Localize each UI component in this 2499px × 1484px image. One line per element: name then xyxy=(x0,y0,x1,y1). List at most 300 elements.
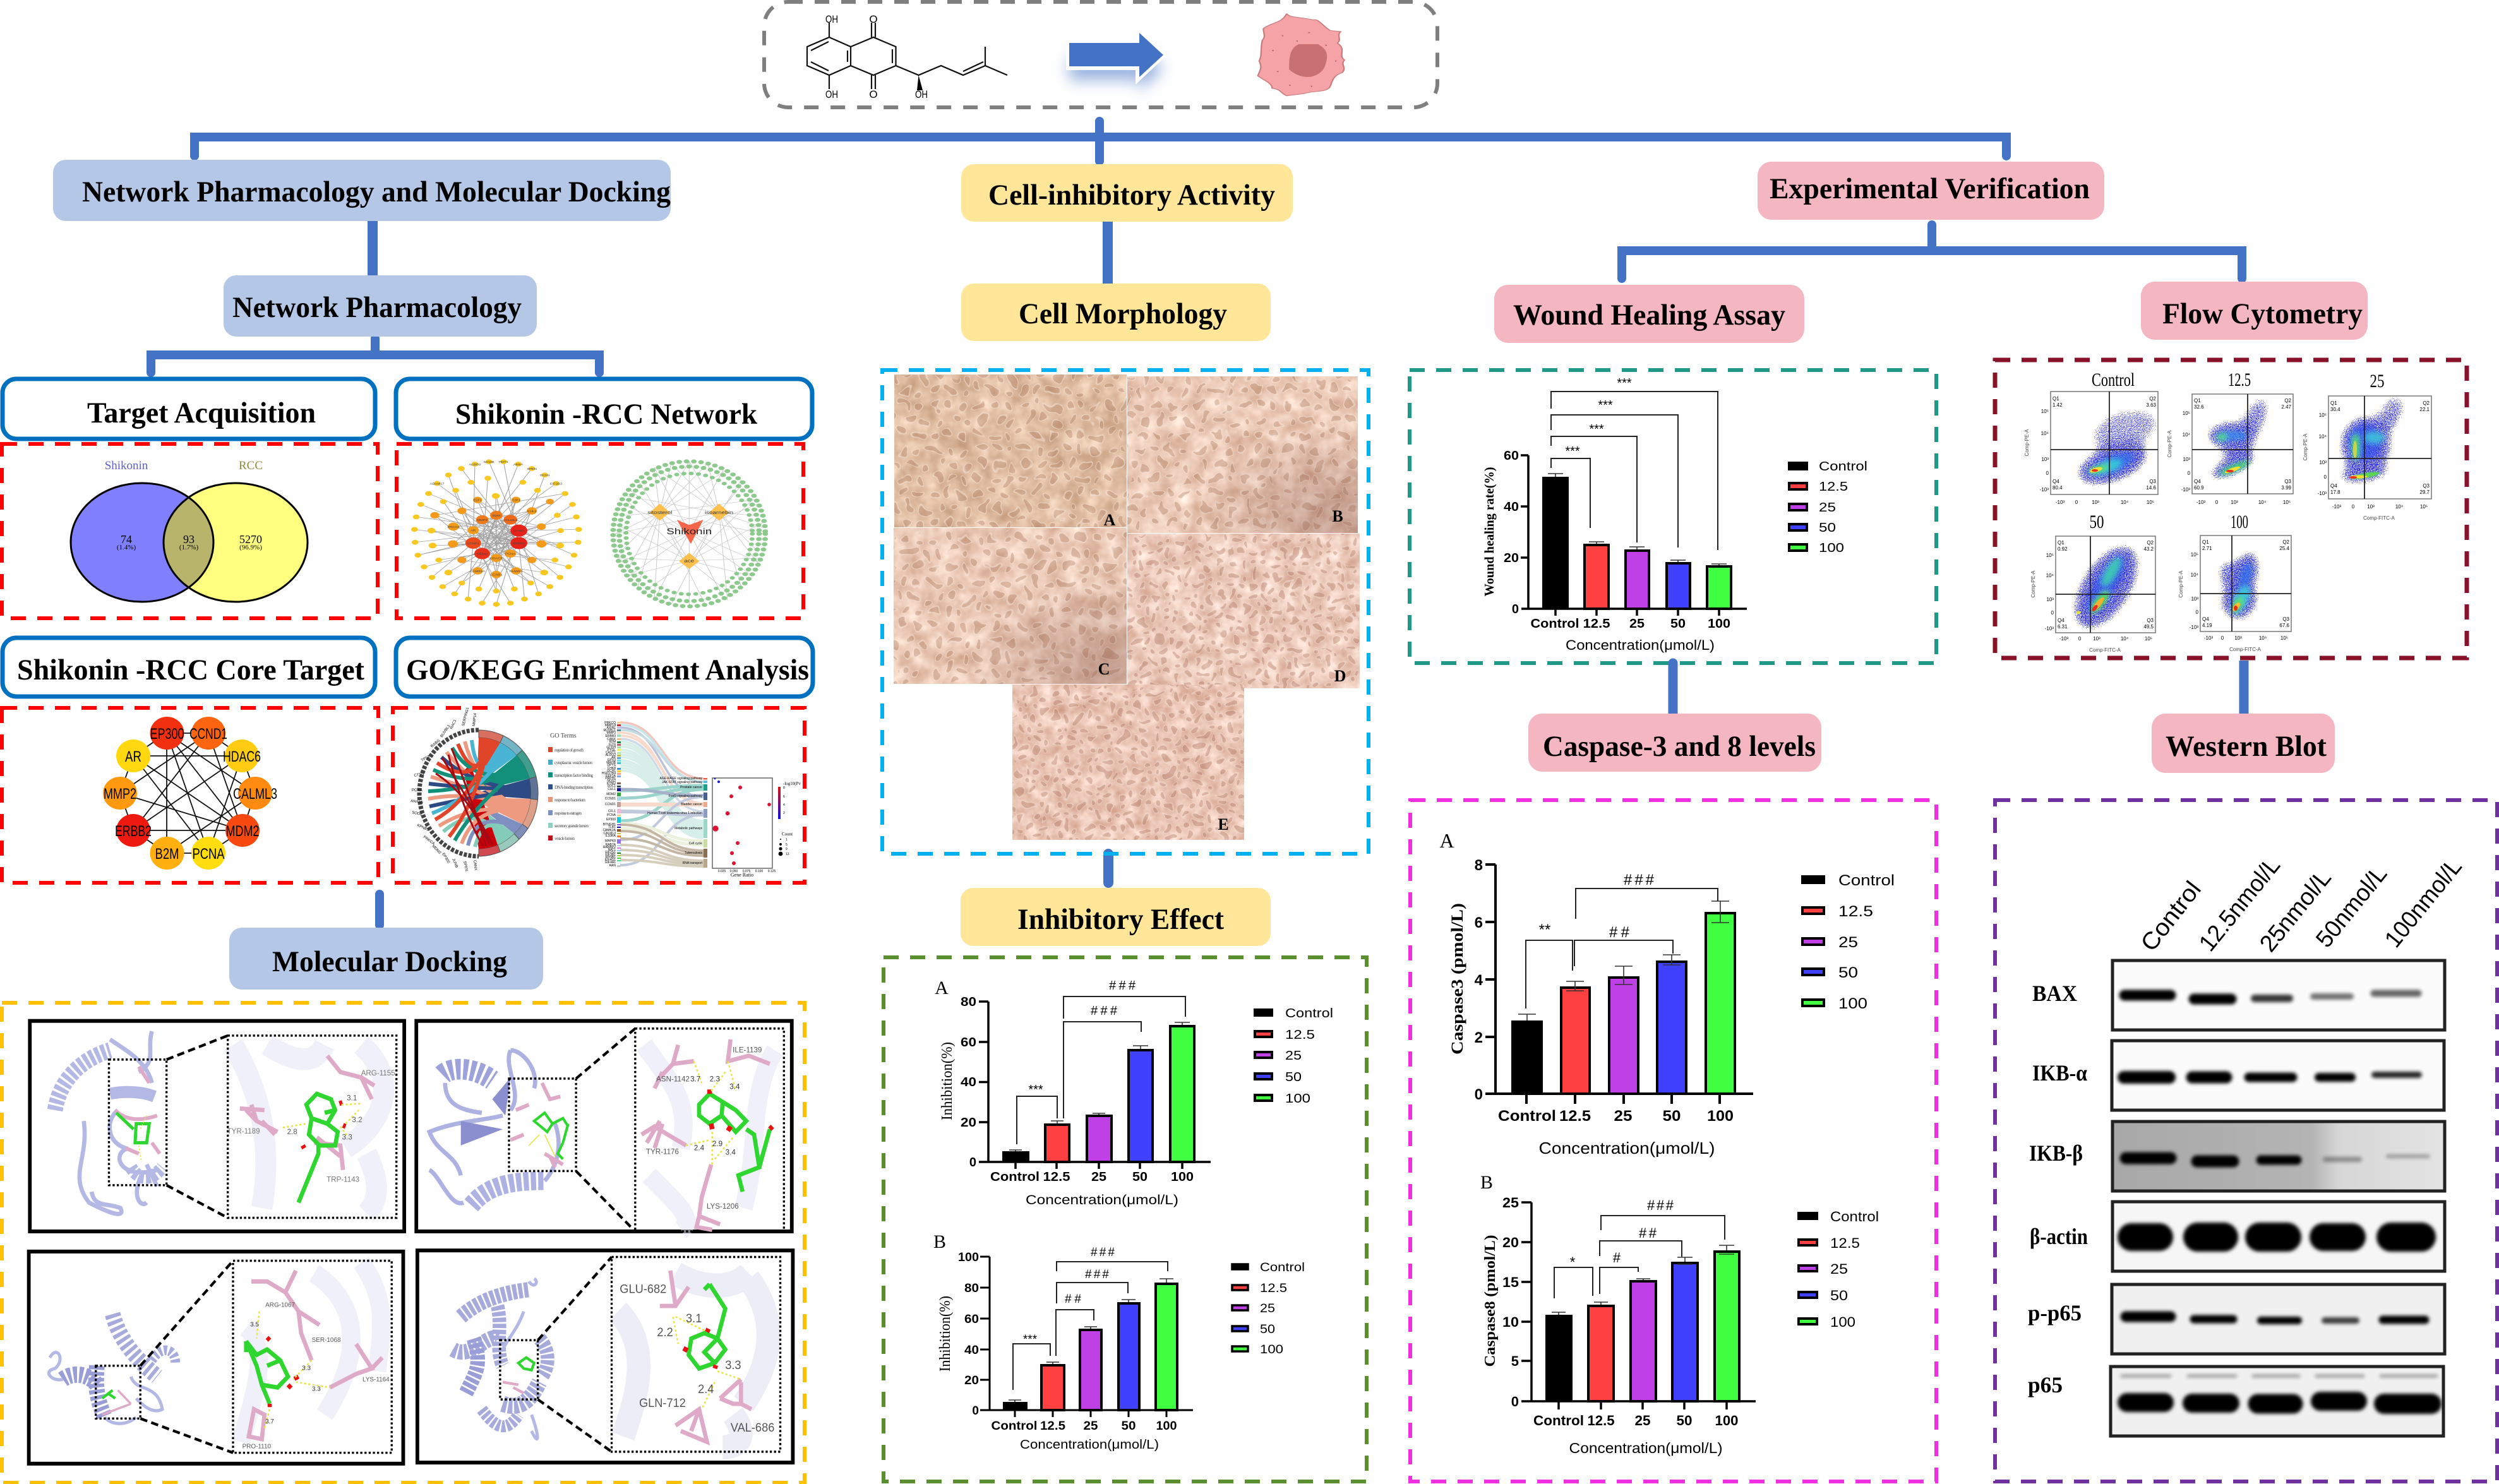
left labels: EIF3B1 xyxy=(605,853,616,857)
bar chart A: caspase 3: 4 xyxy=(1475,972,1483,989)
legend: Control xyxy=(1819,460,1867,474)
heading: Network Pharmacology xyxy=(224,275,537,337)
flow plot: 12.5: 10⁴ xyxy=(2258,500,2267,505)
micrograph C xyxy=(894,528,1127,684)
left labels: CAST1 xyxy=(606,751,616,755)
bar chart A: inhibition: Control xyxy=(990,1170,1040,1184)
flow plot: Control: 10⁵ xyxy=(2147,500,2154,505)
panel: Shikonin-RCC networks xyxy=(397,444,803,618)
nodes xyxy=(103,717,277,870)
bar chart B: caspase 8: 100 xyxy=(1715,1413,1738,1428)
heading: Cell Morphology xyxy=(961,284,1271,341)
heading: Western Blot xyxy=(2152,714,2335,773)
left labels: FLT8 xyxy=(609,743,616,747)
panel: molecular docking xyxy=(2,1003,805,1483)
bar chart A: caspase 3: 2 xyxy=(1475,1029,1483,1046)
bar chart A: caspase 3: 8 xyxy=(1475,857,1483,874)
docking view 2: TYR-1176 xyxy=(646,1147,679,1156)
left labels: GCH1 xyxy=(607,769,616,773)
left labels: HSD17B4 xyxy=(602,772,616,775)
left labels: MMP3 xyxy=(607,731,616,735)
docking view 2: ASN-1142 xyxy=(656,1074,690,1083)
flow plot: 25: Q4 xyxy=(2330,483,2337,489)
chart: PPI network: ABBA xyxy=(513,464,524,467)
column labels xyxy=(2136,853,2467,957)
bar chart B: inhibition: 100 xyxy=(1156,1420,1177,1433)
left labels: CANX xyxy=(607,738,616,741)
column labels: 12.5nmol/L xyxy=(2194,853,2286,957)
tick labels: TP53 xyxy=(421,755,431,763)
right nodes: JAK-STAT signaling pathway xyxy=(662,781,702,784)
bar chart B: inhibition: 80 xyxy=(964,1282,979,1295)
flow plot: Control: 10³ xyxy=(2092,500,2099,505)
legend: GO terms: secretory granule lumen xyxy=(554,823,589,829)
legend xyxy=(1789,460,1867,555)
heading: Shikonin -RCC Network xyxy=(396,379,812,439)
tick labels: PRKCA xyxy=(422,835,435,846)
flow plot: 50: -10³ xyxy=(2059,636,2068,642)
bar chart B: inhibition: 12.5 xyxy=(1040,1420,1065,1433)
chart: PPI network: XRCC6 xyxy=(447,525,460,529)
legend xyxy=(1802,872,1895,1012)
left labels: DPYS xyxy=(607,763,616,767)
micrograph E xyxy=(1012,685,1244,840)
legend: 12.5 xyxy=(1830,1235,1860,1251)
left labels: RAB7A xyxy=(606,843,616,847)
flow plot: 50: Q1 xyxy=(2058,540,2065,546)
bar chart: wound healing rate: *** xyxy=(1565,445,1580,458)
chart: PPI network: PCNA xyxy=(505,553,516,556)
bar chart B: caspase 8: 25 xyxy=(1634,1413,1651,1428)
blot: β-actin: β-actin xyxy=(2030,1224,2088,1249)
bar chart B: inhibition: *** xyxy=(1023,1333,1038,1346)
flow plot: 12.5: 10⁴ xyxy=(2183,432,2191,438)
flow plot: Control: -10³ xyxy=(2056,500,2065,505)
bar chart A: inhibition: 50 xyxy=(1132,1170,1148,1184)
flow plot: 25: Comp-PE-A xyxy=(2303,433,2308,460)
panel: inhibitory effect charts xyxy=(884,957,1367,1481)
panel: venn diagram: 93 xyxy=(183,533,195,546)
left labels: NAT1 xyxy=(608,848,616,852)
bar chart: wound healing rate: 40 xyxy=(1504,500,1519,514)
bar chart B: caspase 8: 20 xyxy=(1502,1235,1519,1250)
bar chart B: inhibition: Concentration(μmol/L) xyxy=(1020,1438,1159,1452)
flow plot: 100 xyxy=(2178,512,2291,652)
flow plot: Control: 0 xyxy=(2075,500,2078,505)
docking view 3: LYS-1164 xyxy=(363,1377,390,1384)
flow plot: 25: 10³ xyxy=(2319,460,2327,465)
legend: 12.5 xyxy=(1819,480,1848,494)
left labels: PYGL xyxy=(608,748,616,752)
chart: PPI network: ADAM17 xyxy=(429,482,445,486)
flow plot: Control xyxy=(2024,369,2166,505)
chart: PPI network: ERBB2 xyxy=(513,542,525,546)
bar chart A: caspase 3: ** xyxy=(1539,921,1550,938)
docking view 2: 3.4 xyxy=(729,1082,740,1091)
flow plot: 100: Q3 xyxy=(2282,616,2290,622)
flow plot: 12.5: 10⁵ xyxy=(2183,410,2190,416)
panel: venn diagram: (1.4%) xyxy=(117,544,136,551)
heading: Target Acquisition xyxy=(3,379,375,439)
left labels: GCDH xyxy=(606,746,616,750)
chart: PPI network: CALML3 xyxy=(503,519,518,522)
flow plot: 25: 10³ xyxy=(2367,504,2375,510)
chart: PPI network: EP300 xyxy=(513,530,524,533)
column labels: 25nmol/L xyxy=(2255,865,2337,957)
bar chart B: inhibition: ### xyxy=(1091,1246,1115,1259)
chart: compound-target network: isoarnebin xyxy=(705,510,733,515)
flow plot: 25: 22.1 xyxy=(2419,407,2430,412)
left labels: NOS2 xyxy=(607,779,616,783)
legend: 12.5 xyxy=(1260,1282,1287,1295)
tick labels: JUNB xyxy=(451,858,458,868)
docking view 2: 3.7 xyxy=(690,1074,700,1083)
flow plot: 12.5: 32.6 xyxy=(2194,404,2204,410)
tick labels: SOD2 xyxy=(412,811,422,817)
chart: KEGG dot plot: 9 xyxy=(786,847,788,851)
right nodes: Metabolic pathways xyxy=(674,827,702,830)
flow plot: 100: -10³ xyxy=(2204,635,2213,641)
docking view 2: ILE-1139 xyxy=(733,1045,762,1055)
flow plot: Control: 14.6 xyxy=(2146,485,2157,491)
bar chart A: caspase 3: ## xyxy=(1609,924,1630,941)
legend: 25 xyxy=(1285,1049,1302,1063)
flow plot: 50: 6.31 xyxy=(2058,624,2068,630)
blot: p-p65 xyxy=(2028,1284,2445,1354)
flow plot: 25: 0 xyxy=(2324,474,2327,480)
heading: GO/KEGG Enrichment Analysis xyxy=(396,638,813,697)
dashed frame xyxy=(764,2,1437,107)
blot: BAX: BAX xyxy=(2032,981,2077,1006)
flow plot: 25: -10³ xyxy=(2332,504,2341,510)
flow plot: 50: 10³ xyxy=(2046,597,2054,602)
legend: 50 xyxy=(1285,1070,1302,1084)
flow plot: 25: Q1 xyxy=(2330,400,2337,406)
shikonin structure xyxy=(807,13,1007,100)
docking view 3: SER-1068 xyxy=(312,1337,341,1344)
micrograph E: E xyxy=(1218,815,1229,834)
docking view 1: 2.8 xyxy=(287,1127,297,1136)
heading: Flow Cytometry: Flow Cytometry xyxy=(2162,297,2363,330)
left labels: KPNB1 xyxy=(606,856,616,859)
bar chart A: inhibition: 100 xyxy=(1171,1170,1194,1184)
left labels: MDM2 xyxy=(606,793,616,796)
nodes: CCND1 xyxy=(189,726,227,743)
bar chart B: caspase 8: * xyxy=(1570,1254,1576,1270)
bar chart B: inhibition: Control xyxy=(992,1420,1037,1433)
chart: KEGG dot plot: 4 xyxy=(783,803,785,807)
heading: Cell Morphology: Cell Morphology xyxy=(1019,297,1227,330)
shikonin structure: OH xyxy=(915,88,928,100)
flow plot: 25: 25 xyxy=(2370,371,2385,392)
bar chart: wound healing rate xyxy=(1482,376,1867,653)
chart: compound-target network: ace xyxy=(684,558,694,563)
tick labels: SERPING1 xyxy=(462,707,470,726)
bar chart: wound healing rate: Control xyxy=(1531,617,1579,631)
chart: KEGG dot plot: 0.100 xyxy=(755,870,763,873)
flow plot: 50: 0 xyxy=(2051,610,2054,616)
flow plot: 50: 50 xyxy=(2089,512,2104,532)
flow plot: Control: 10⁴ xyxy=(2121,500,2129,505)
bar chart: wound healing rate: Wound healing rate(%) xyxy=(1482,467,1497,596)
heading: Western Blot: Western Blot xyxy=(2166,730,2327,763)
legend: 25 xyxy=(1838,934,1858,951)
chart: KEGG dot plot: 0.050 xyxy=(730,870,738,873)
legend: GO terms: vesicle lumen xyxy=(554,836,575,841)
flow plot: 50 xyxy=(2030,512,2155,653)
flow plot: 100: 25.4 xyxy=(2279,546,2290,551)
flow plot: 50: 10³ xyxy=(2093,636,2100,642)
flow plot: 25: 10⁴ xyxy=(2319,434,2327,440)
tick labels: RAC1 xyxy=(450,719,458,730)
chart: PPI network: ALDO2 xyxy=(469,464,481,467)
bar chart: wound healing rate: *** xyxy=(1589,422,1604,436)
left labels: EP300 xyxy=(606,818,616,822)
chart: KEGG dot plot: Count xyxy=(782,832,793,837)
chart: PPI network: E2F1 xyxy=(473,499,482,502)
docking view 3 xyxy=(29,1252,403,1464)
flow plot: 25: -10³ xyxy=(2318,491,2327,496)
chart: Sankey diagram xyxy=(602,721,707,868)
flow plot: 100: Comp-PE-A xyxy=(2178,570,2184,597)
legend: GO terms: regulation of growth xyxy=(554,748,584,753)
docking view 2: 2.3 xyxy=(710,1074,720,1083)
heading: Shikonin -RCC Core Target xyxy=(3,638,375,697)
legend: 100 xyxy=(1838,995,1867,1012)
flow plot: 50: 43.2 xyxy=(2143,546,2154,552)
panel: western blot xyxy=(1995,800,2497,1481)
micrograph D: D xyxy=(1334,667,1346,685)
bar chart B: inhibition: B xyxy=(933,1231,946,1252)
bar chart A: inhibition xyxy=(935,978,1333,1207)
bar chart A: caspase 3: 0 xyxy=(1475,1086,1483,1103)
bar chart A: inhibition: 60 xyxy=(961,1036,976,1050)
bar chart B: inhibition: 60 xyxy=(964,1313,979,1326)
bar chart A: inhibition: 25 xyxy=(1091,1170,1106,1184)
panel: venn diagram: 74 xyxy=(121,533,132,546)
bar chart A: caspase 3: 100 xyxy=(1707,1108,1734,1125)
heading: Caspase-3 and 8 levels xyxy=(1528,714,1821,772)
chart: PPI network: MADB xyxy=(484,461,494,464)
left labels: KYNU xyxy=(607,782,616,786)
legend: Control xyxy=(1830,1209,1879,1224)
chart: KEGG dot plot: 6 xyxy=(783,795,785,799)
flow plot: Control: 10³ xyxy=(2041,457,2049,462)
tick labels: CTTN xyxy=(414,772,424,778)
blot: IKB-α xyxy=(2032,1041,2444,1110)
column labels: 100nmol/L xyxy=(2380,854,2467,953)
panel: flow cytometry xyxy=(1995,360,2467,658)
micrograph C: C xyxy=(1098,660,1110,678)
flow plot: 50: Q4 xyxy=(2058,618,2065,623)
heading: Network Pharmacology and Molecular Docking: Network Pharmacology and Molecular Docking xyxy=(82,176,671,208)
legend: 25 xyxy=(1830,1261,1848,1277)
legend xyxy=(1232,1261,1305,1356)
micrograph A: A xyxy=(1104,511,1116,529)
chart: PPI network: GCH1 xyxy=(540,474,550,477)
bar chart A: inhibition: 20 xyxy=(961,1116,976,1130)
flow plot: 50: Q2 xyxy=(2147,540,2154,546)
tick labels: BUVBL1 xyxy=(440,724,452,738)
bar chart: wound healing rate: 12.5 xyxy=(1583,617,1610,631)
chart: compound-target network: Shikonin xyxy=(666,527,712,536)
chart: PPI network: SPEN xyxy=(527,468,537,471)
left labels: CAMK2A xyxy=(602,829,616,832)
legend: 100 xyxy=(1819,541,1844,555)
left labels: PRKCQ xyxy=(604,721,616,725)
flow plot: 100: Q2 xyxy=(2282,539,2290,545)
flow plot: 100: 67.6 xyxy=(2279,623,2290,628)
bar chart B: caspase 8: 15 xyxy=(1502,1274,1519,1290)
flow plot: 50: 49.5 xyxy=(2143,624,2154,630)
flow plot: 12.5: 2.47 xyxy=(2281,404,2292,410)
flow plot: Control: 10⁵ xyxy=(2041,409,2049,414)
bar chart B: caspase 8: 0 xyxy=(1511,1394,1519,1409)
flow plot: 12.5: 10³ xyxy=(2183,457,2190,462)
left labels: CHK8 xyxy=(608,767,616,770)
blot: p65 xyxy=(2028,1367,2443,1436)
bar chart A: inhibition: A xyxy=(935,978,949,998)
bar chart B: caspase 8: 25 xyxy=(1502,1195,1519,1211)
legend: 50 xyxy=(1260,1323,1275,1336)
micrograph B: B xyxy=(1332,507,1343,525)
flow plot: 50: -10³ xyxy=(2045,626,2054,631)
left labels: ALDO2 xyxy=(606,753,616,757)
flow plot: 12.5: Q1 xyxy=(2194,398,2201,404)
flow plot: Control: 3.63 xyxy=(2146,402,2157,408)
bar chart A: inhibition: ### xyxy=(1109,979,1136,993)
bar chart B: caspase 8: Caspase8 (pmol/L) xyxy=(1482,1235,1499,1367)
chart: PPI network: HDAC6 xyxy=(490,557,503,560)
flow plot: 12.5: Q3 xyxy=(2284,479,2292,484)
chart: PPI network: CAMK2A xyxy=(470,570,486,573)
heading: Caspase-3 and 8 levels: Caspase-3 and 8 levels xyxy=(1543,730,1816,763)
panel: caspase charts xyxy=(1410,800,1936,1481)
flow plot: 25: 10⁵ xyxy=(2319,412,2327,418)
flow plot: 25: 17.8 xyxy=(2330,489,2340,495)
panel: wound healing chart xyxy=(1410,370,1936,663)
shikonin structure: O xyxy=(869,88,878,100)
left labels: RANBP2 xyxy=(603,846,616,849)
flow plot: 25: 0 xyxy=(2352,504,2355,510)
legend: 100 xyxy=(1285,1092,1310,1106)
bar chart: wound healing rate: 50 xyxy=(1670,617,1686,631)
left labels: CCND1 xyxy=(605,803,616,806)
docking view 1: 3.1 xyxy=(347,1093,357,1102)
flow plot: Control: 10⁴ xyxy=(2041,431,2049,436)
right nodes: FoxO signaling pathway xyxy=(669,794,702,798)
heading: Experimental Verification: Experimental Verification xyxy=(1770,172,2090,205)
tick labels: RABG xyxy=(430,739,441,749)
bar chart B: inhibition: ### xyxy=(1085,1268,1109,1281)
chart: PPI network: CUL1 xyxy=(527,510,537,513)
bar chart A: inhibition: 12.5 xyxy=(1043,1170,1070,1184)
bar chart B: caspase 8: 5 xyxy=(1511,1353,1519,1369)
docking view 1: TRP-1143 xyxy=(327,1175,360,1184)
docking view 4: GLN-712 xyxy=(639,1396,686,1409)
left labels: ERBB3 xyxy=(606,734,616,738)
right nodes: Cell cycle xyxy=(689,842,702,846)
bar chart A: caspase 3 xyxy=(1439,829,1895,1158)
flow plot: Control: Q1 xyxy=(2053,396,2059,402)
chart: PPI network: B2M xyxy=(493,515,500,518)
panel: venn diagram: RCC xyxy=(239,459,263,472)
micrograph B xyxy=(1127,376,1358,533)
flow plot: 50: 10⁵ xyxy=(2046,553,2054,558)
left labels: MAPK8 xyxy=(605,839,616,843)
left labels: AR xyxy=(611,756,616,760)
heading: Experimental Verification xyxy=(1758,162,2104,220)
docking view 3: 3.3 xyxy=(312,1385,321,1392)
heading: Inhibitory Effect xyxy=(961,888,1271,946)
shikonin structure: OH xyxy=(825,88,838,100)
bar chart B: inhibition: Inhibition(%) xyxy=(937,1296,954,1372)
bar chart: wound healing rate: 60 xyxy=(1504,449,1519,463)
legend: GO terms: transcription factor binding xyxy=(554,773,594,778)
chart: KEGG dot plot: 8 xyxy=(783,786,785,790)
left labels: AXIN1 xyxy=(607,726,616,730)
docking view 3: PRO-1110 xyxy=(243,1444,271,1451)
bar chart: wound healing rate: 20 xyxy=(1504,551,1519,565)
flow plot: 50: 0 xyxy=(2078,636,2082,642)
bar chart B: caspase 8 xyxy=(1480,1172,1879,1456)
legend: GO terms xyxy=(548,733,594,841)
legend xyxy=(1255,1007,1333,1106)
flow plot: Control: 1.42 xyxy=(2053,402,2063,408)
blot: p-p65: p-p65 xyxy=(2028,1300,2082,1325)
left labels: EEF1A xyxy=(606,774,616,778)
flow plot: 25 xyxy=(2303,371,2431,521)
legend: 100 xyxy=(1830,1314,1855,1330)
flow plot: 12.5: -10³ xyxy=(2196,500,2205,505)
legend: 25 xyxy=(1819,501,1836,515)
tick labels: KPNB1 xyxy=(416,823,429,832)
right nodes: RNA transport xyxy=(683,861,703,865)
chart: KEGG dot plot xyxy=(712,778,801,878)
nodes: EP300 xyxy=(150,726,184,743)
bar chart A: inhibition: 0 xyxy=(969,1156,976,1170)
docking view 1 xyxy=(30,1021,404,1231)
flow plot: 12.5: 0 xyxy=(2188,470,2191,476)
flow plot: 100: 10⁴ xyxy=(2259,635,2267,641)
column labels: 50nmol/L xyxy=(2311,861,2392,953)
flow plot: 12.5: 12.5 xyxy=(2228,369,2251,390)
left nodes xyxy=(617,722,621,867)
flow plot: 25: 10⁴ xyxy=(2395,504,2404,510)
bar chart A: inhibition: ### xyxy=(1091,1004,1118,1018)
heading: Network Pharmacology and Molecular Docking xyxy=(53,160,671,221)
chart: PPI network: CCND1 xyxy=(467,542,479,546)
blot: IKB-α: IKB-α xyxy=(2032,1060,2087,1086)
flow plot: 100: 0 xyxy=(2221,635,2224,641)
flow plot: 50: Comp-PE-A xyxy=(2030,570,2036,597)
bar chart A: inhibition: Inhibition(%) xyxy=(939,1042,956,1120)
flow plot: Control: Q2 xyxy=(2149,396,2157,402)
chart: PPI network: HUWE1 xyxy=(510,570,523,573)
left labels: PCNA xyxy=(607,813,616,817)
column labels: Control xyxy=(2136,877,2207,957)
chart: KEGG dot plot: 5 xyxy=(786,843,788,847)
bar chart B: inhibition: 100 xyxy=(958,1251,979,1264)
left labels: BTNGH1 xyxy=(603,823,616,827)
flow plot: 25: 30.4 xyxy=(2330,407,2340,412)
docking view 4: GLU-682 xyxy=(620,1282,666,1295)
flow plot: 25: Comp-FITC-A xyxy=(2363,515,2395,521)
bar chart A: caspase 3: 6 xyxy=(1475,914,1483,931)
bar chart B: inhibition: 20 xyxy=(964,1374,979,1387)
left labels: CALML3 xyxy=(604,832,616,835)
right nodes: Bladder cancer xyxy=(681,803,702,806)
